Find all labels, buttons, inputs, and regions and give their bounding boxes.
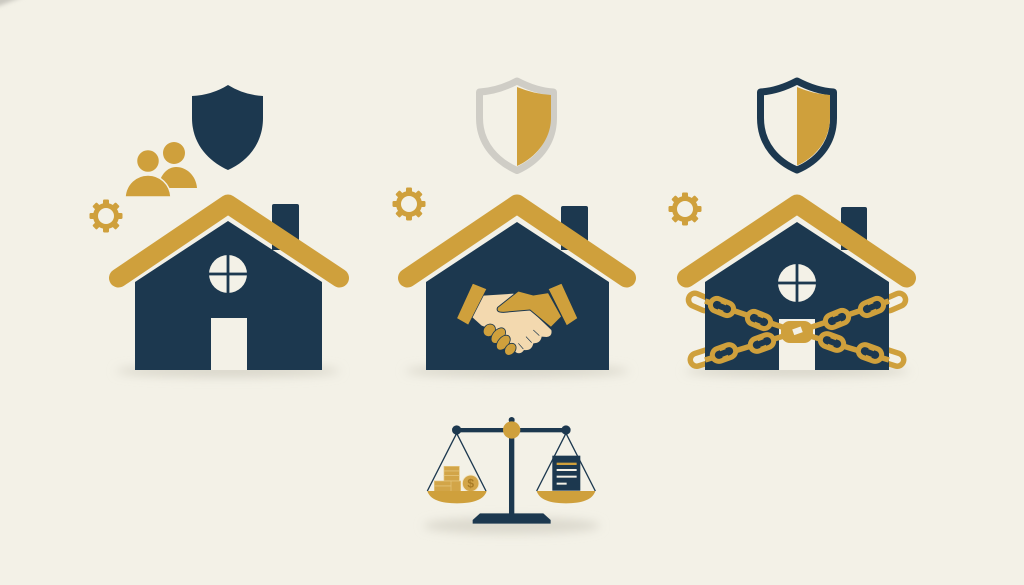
coins bbox=[434, 466, 479, 492]
roof 3 bbox=[686, 204, 906, 278]
scale stand bbox=[452, 417, 571, 524]
house body 1 bbox=[135, 221, 322, 370]
icon: gear 2 bbox=[392, 188, 426, 220]
ground shadow 3 bbox=[685, 365, 909, 377]
round window 1 bbox=[209, 255, 247, 293]
chimney 2 bbox=[561, 206, 588, 250]
scale pans bbox=[427, 491, 595, 503]
icon: gear 3 bbox=[668, 192, 702, 226]
background corner smudge bbox=[0, 0, 25, 7]
light hand bbox=[472, 294, 552, 353]
chains crossing the house bbox=[705, 296, 889, 364]
shield: half gold with grey outline bbox=[480, 81, 554, 170]
shield half fill 3 bbox=[797, 87, 830, 166]
icon: gear 1 bbox=[90, 200, 122, 232]
gold hand bbox=[497, 291, 562, 327]
roof 2 bbox=[408, 204, 626, 278]
scale pivot bbox=[503, 421, 520, 439]
balance scale bbox=[423, 417, 600, 534]
chimney 3 bbox=[841, 207, 867, 250]
house 1: shared ownership bbox=[116, 204, 340, 377]
right cuff bbox=[548, 283, 578, 326]
chimney 1 bbox=[272, 204, 299, 250]
scale strings bbox=[427, 433, 595, 491]
fingers bbox=[481, 322, 518, 358]
house 3: chained bbox=[685, 204, 909, 377]
house 2: agreement bbox=[405, 204, 629, 377]
shield: half gold with navy outline bbox=[760, 81, 834, 170]
shield half fill 2 bbox=[517, 87, 551, 166]
knuckle lines bbox=[518, 330, 539, 349]
chain centre link bbox=[781, 321, 813, 343]
house body 3 bbox=[705, 222, 889, 370]
icon: people bbox=[125, 142, 197, 197]
document bbox=[552, 456, 580, 491]
ground shadow 2 bbox=[405, 365, 629, 377]
house body 2 bbox=[426, 222, 609, 370]
chain end links behind the house bbox=[686, 291, 908, 368]
left cuff bbox=[457, 283, 487, 325]
door 3 bbox=[779, 319, 815, 370]
door 1 bbox=[211, 318, 247, 370]
dollar sign on coin: $ bbox=[467, 477, 474, 491]
icon: handshake bbox=[457, 283, 578, 358]
ground shadow 1 bbox=[116, 365, 340, 377]
shield: solid navy bbox=[192, 85, 263, 170]
roof 1 bbox=[118, 204, 340, 278]
round window 3 bbox=[778, 264, 816, 302]
scale shadow bbox=[423, 517, 600, 534]
